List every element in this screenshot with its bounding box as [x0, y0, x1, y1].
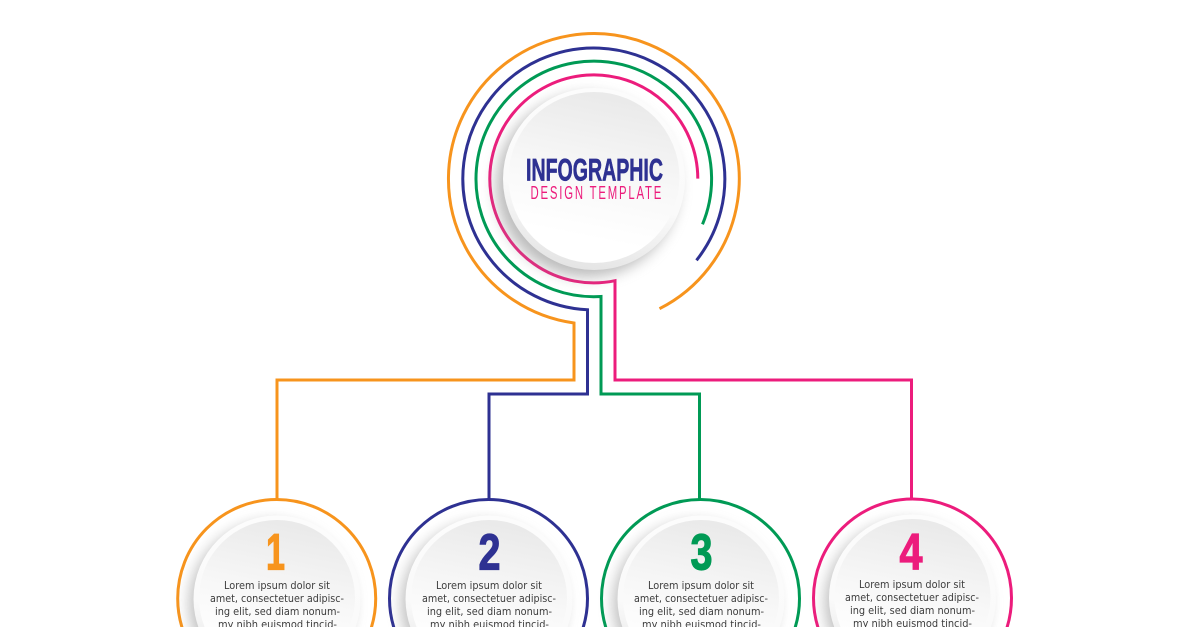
- body text: Lorem ipsum dolor sit: [648, 579, 755, 592]
- body text: Lorem ipsum dolor sit: [859, 578, 966, 591]
- body text: ing elit, sed diam nonum-: [427, 605, 552, 618]
- shadow: [189, 522, 353, 627]
- ring: [602, 500, 800, 627]
- disc: [194, 516, 360, 627]
- body text: amet, consectetuer adipisc-: [634, 592, 768, 605]
- connector lines and spiral arcs: [277, 34, 912, 499]
- disc: [829, 514, 996, 627]
- body text: amet, consectetuer adipisc-: [845, 591, 979, 604]
- body text: [845, 578, 979, 627]
- subtitle: DESIGN TEMPLATE: [530, 184, 661, 204]
- pink line: [490, 75, 912, 499]
- body text: amet, consectetuer adipisc-: [422, 592, 556, 605]
- body text: Lorem ipsum dolor sit: [224, 579, 331, 592]
- body text: ing elit, sed diam nonum-: [639, 605, 764, 618]
- body text: ing elit, sed diam nonum-: [215, 605, 340, 618]
- shadow: [824, 521, 988, 627]
- body text: [422, 579, 556, 627]
- number: 3: [690, 524, 712, 580]
- body text: [634, 579, 768, 627]
- number: 1: [266, 524, 285, 580]
- disc: [618, 516, 784, 627]
- ring: [390, 500, 588, 627]
- orange line: [277, 34, 739, 499]
- step 1 circle: [178, 500, 376, 627]
- blue line: [463, 48, 725, 499]
- body text: amet, consectetuer adipisc-: [210, 592, 344, 605]
- title: INFOGRAPHIC: [526, 151, 663, 187]
- body text: Lorem ipsum dolor sit: [436, 579, 543, 592]
- disc rim: [503, 88, 685, 270]
- ring: [178, 500, 376, 627]
- step 3 circle: [602, 500, 800, 627]
- disc: [406, 516, 572, 627]
- step 4 circle: [814, 499, 1012, 627]
- central title disc: [496, 88, 685, 277]
- disc face: [508, 92, 680, 263]
- body text: ing elit, sed diam nonum-: [850, 604, 975, 617]
- shadow: [401, 522, 565, 627]
- disc shadow: [496, 95, 678, 277]
- number: 4: [900, 523, 923, 580]
- number: 2: [478, 524, 500, 580]
- green line: [476, 61, 712, 499]
- step 2 circle: [390, 500, 588, 627]
- shadow: [613, 522, 777, 627]
- body text: [210, 579, 344, 627]
- ring: [814, 499, 1012, 627]
